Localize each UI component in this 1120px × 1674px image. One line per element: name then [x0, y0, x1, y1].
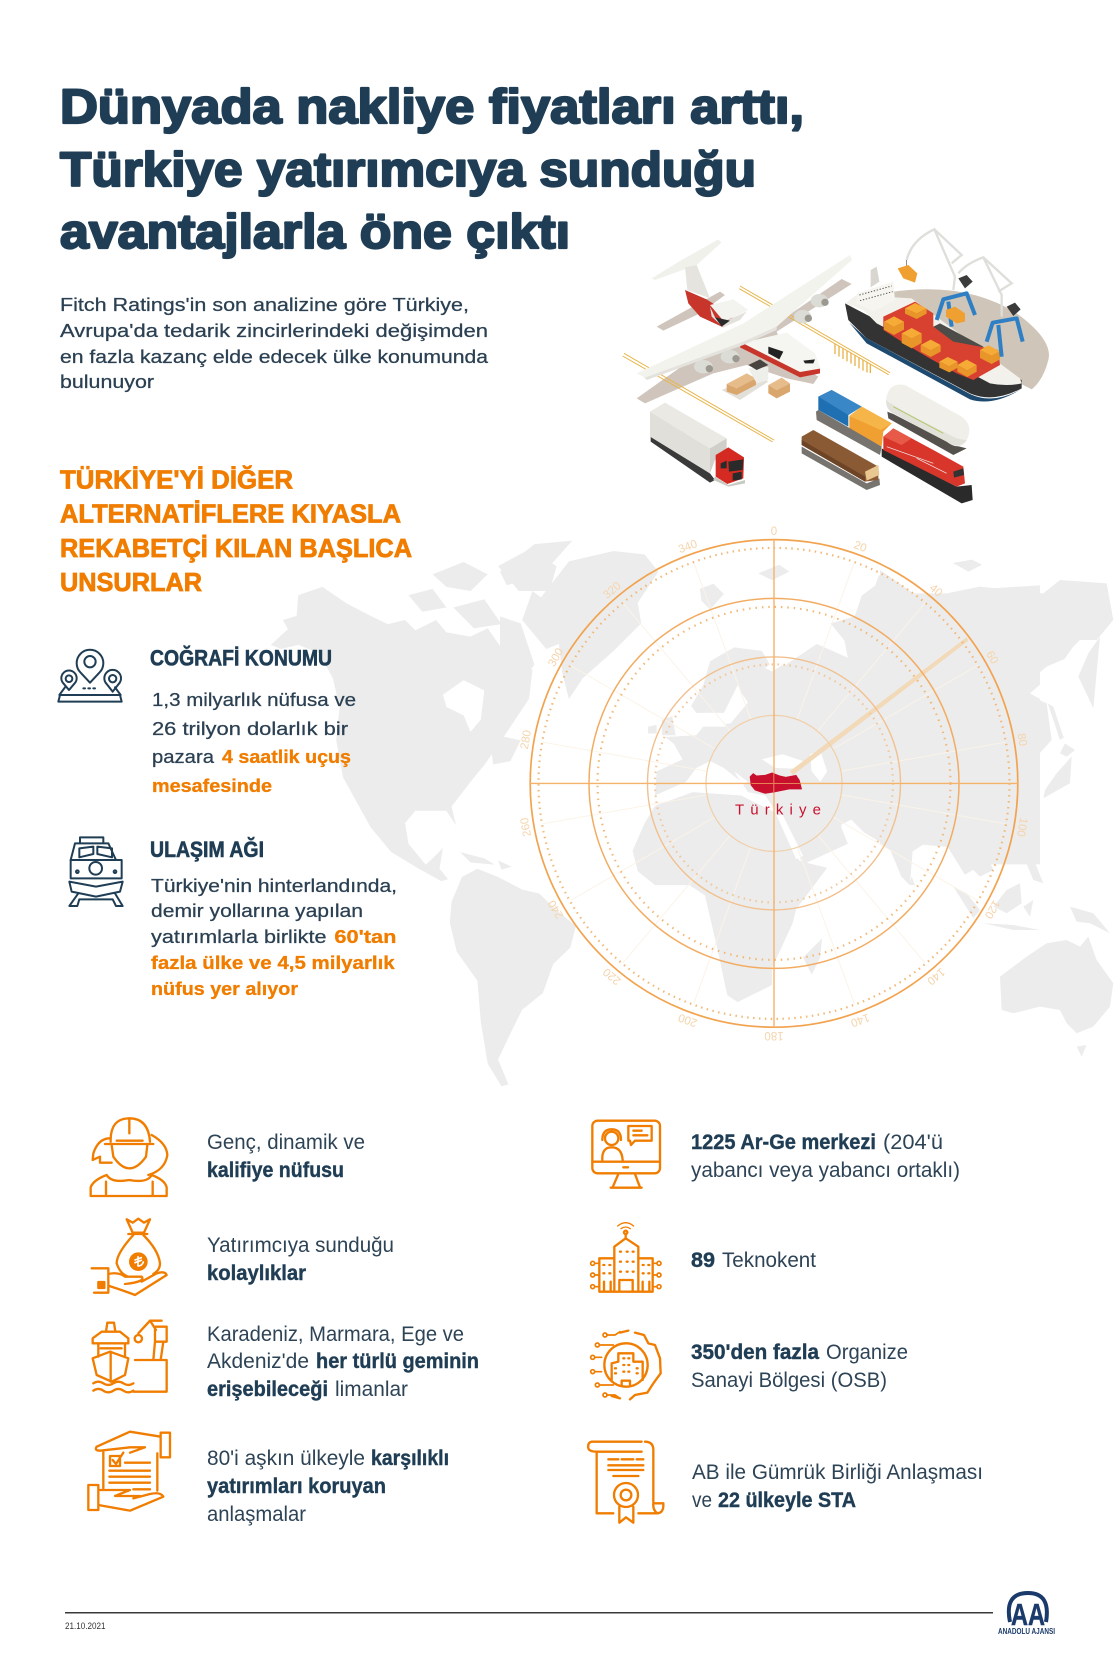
text: Karadeniz, Marmara, Ege ve	[207, 1323, 464, 1346]
logo: Anadolu Ajansı: ANADOLU AJANSI	[998, 1627, 1055, 1636]
item: investor facilities	[92, 1219, 394, 1295]
text: 1225 Ar-Ge merkezi	[691, 1131, 876, 1154]
text	[207, 1131, 365, 1182]
description: 1,3 milyarlık nüfusa ve	[152, 690, 356, 710]
icon: smart building	[591, 1223, 661, 1292]
text: Yatırımcıya sunduğu	[207, 1234, 394, 1257]
log wagon	[802, 430, 880, 490]
icon: monitor with operator	[592, 1121, 660, 1188]
compass chart centred on Türkiye: 340	[677, 538, 699, 556]
item: ports	[93, 1321, 479, 1401]
heading: competitive factors	[60, 464, 412, 597]
compass chart centred on Türkiye: 280	[519, 729, 534, 750]
compass chart centred on Türkiye: 100	[1014, 817, 1029, 838]
text: 89	[691, 1249, 715, 1272]
text	[207, 1323, 479, 1401]
description: yatırımlarla birlikte	[151, 927, 326, 947]
compass chart centred on Türkiye: 320	[601, 580, 624, 602]
compass chart centred on Türkiye: 0	[771, 526, 777, 538]
text	[691, 1341, 908, 1392]
illustration: transport and logistics	[623, 229, 1049, 503]
icon: locomotive	[69, 837, 123, 906]
text: Akdeniz'de	[207, 1350, 309, 1373]
text: Teknokent	[722, 1249, 816, 1272]
heading: ULAŞIM AĞI	[150, 837, 264, 862]
text: yatırımları koruyan	[207, 1475, 386, 1498]
description: pazara	[152, 747, 215, 767]
compass chart centred on Türkiye: 180	[764, 1029, 784, 1041]
text: AB ile Gümrük Birliği Anlaşması	[692, 1461, 983, 1484]
icon: certificate scroll	[588, 1442, 663, 1523]
icon: location pins	[58, 650, 122, 702]
item: organized industrial zones	[591, 1331, 908, 1399]
title: avantajlarla öne çıktı	[60, 206, 570, 259]
text: kolaylıklar	[207, 1262, 306, 1285]
item: investment protection agreements	[88, 1432, 449, 1526]
title: Dünyada nakliye fiyatları arttı,	[60, 81, 804, 134]
item: technoparks	[591, 1223, 816, 1292]
description	[152, 690, 356, 796]
Türkiye map marker and label	[735, 772, 821, 818]
text: 80'i aşkın ülkeyle	[207, 1447, 365, 1470]
description: 26 trilyon dolarlık bir	[152, 719, 348, 739]
description: fazla ülke ve 4,5 milyarlık	[151, 953, 396, 973]
cargo	[722, 359, 790, 400]
description	[151, 876, 397, 999]
ship	[845, 267, 1022, 401]
compass chart centred on Türkiye: 260	[519, 817, 534, 838]
text	[207, 1447, 449, 1526]
heading: competitive factors: TÜRKİYE'Yİ DİĞER	[60, 464, 293, 494]
text: Organize	[826, 1341, 908, 1364]
title	[60, 81, 804, 259]
text: 22 ülkeyle STA	[718, 1489, 856, 1512]
locomotive	[882, 428, 973, 503]
container wagons	[816, 390, 892, 455]
intro text: Avrupa'da tedarik zincirlerindeki değişimden	[60, 321, 488, 341]
truck	[650, 403, 745, 487]
text: (204'ü	[883, 1131, 943, 1154]
compass chart centred on Türkiye: 300	[546, 646, 566, 669]
description: Türkiye'nin hinterlandında,	[151, 876, 397, 896]
world map background	[271, 541, 1113, 1086]
logo: Anadolu Ajansı: AA	[1011, 1597, 1045, 1632]
item: young workforce	[91, 1118, 365, 1196]
compass chart centred on Türkiye: 20	[852, 539, 868, 555]
text: limanlar	[335, 1378, 408, 1401]
description: 4 saatlik uçuş	[222, 747, 351, 767]
footer rule and date: 21.10.2021	[65, 1621, 106, 1631]
Türkiye map marker and label: Türkiye	[735, 802, 821, 818]
compass chart centred on Türkiye: 200	[677, 1011, 699, 1029]
text: kalifiye nüfusu	[207, 1159, 344, 1182]
text: 350'den fazla	[691, 1341, 819, 1364]
compass chart centred on Türkiye	[519, 526, 1029, 1041]
intro text: bulunuyor	[60, 372, 154, 392]
item: customs union and free trade agreements	[588, 1442, 983, 1523]
heading: competitive factors: ALTERNATİFLERE KIYASLA	[60, 498, 401, 528]
compass chart centred on Türkiye: 140	[849, 1011, 871, 1029]
compass chart centred on Türkiye: 220	[601, 965, 624, 987]
compass chart centred on Türkiye: 120	[982, 898, 1002, 920]
title: Türkiye yatırımcıya sunduğu	[60, 144, 756, 197]
heading: competitive factors: REKABETÇİ KILAN BAŞLICA	[60, 533, 412, 563]
logo: Anadolu Ajansı	[998, 1593, 1055, 1636]
description: mesafesinde	[152, 776, 272, 796]
icon: money bag on hand	[92, 1219, 167, 1295]
text: Sanayi Bölgesi (OSB)	[691, 1369, 887, 1392]
icon: gear with buildings	[591, 1331, 661, 1399]
text: yabancı veya yabancı ortaklı)	[691, 1159, 960, 1182]
intro text: Fitch Ratings'in son analizine göre Türkiye,	[60, 295, 469, 315]
compass chart centred on Türkiye: 80	[1015, 732, 1029, 747]
text	[691, 1131, 960, 1182]
text	[692, 1461, 983, 1512]
text: Genç, dinamik ve	[207, 1131, 365, 1154]
text	[207, 1234, 394, 1285]
description: 60'tan	[334, 927, 396, 947]
compass chart centred on Türkiye: 140	[924, 965, 947, 987]
tanker wagon	[886, 384, 969, 455]
plane shadow and runway	[623, 279, 890, 442]
icon: document between hands	[88, 1432, 170, 1511]
text: erişebileceği	[207, 1378, 328, 1401]
intro text: en fazla kazanç elde edecek ülke konumunda	[60, 347, 489, 367]
description: demir yollarına yapılan	[151, 901, 363, 921]
description: nüfus yer alıyor	[151, 979, 298, 999]
compass chart centred on Türkiye: 60	[983, 649, 1000, 666]
text: karşılıklı	[371, 1447, 449, 1470]
text: her türlü geminin	[316, 1350, 479, 1373]
compass chart centred on Türkiye: 40	[927, 582, 944, 600]
section: transport network	[69, 837, 397, 999]
quay	[893, 289, 1049, 389]
text: anlaşmalar	[207, 1503, 306, 1526]
heading: COĞRAFİ KONUMU	[150, 646, 332, 670]
cranes	[898, 229, 1023, 357]
item: R&D centres	[592, 1121, 960, 1188]
compass chart centred on Türkiye: 240	[546, 898, 566, 920]
airplane	[637, 239, 852, 380]
heading: competitive factors: UNSURLAR	[60, 567, 202, 597]
intro text	[60, 295, 489, 392]
text: ve	[692, 1489, 712, 1512]
icon: workers	[91, 1118, 167, 1196]
section: geographic location	[58, 646, 356, 796]
icon: ship and crane	[93, 1321, 167, 1392]
